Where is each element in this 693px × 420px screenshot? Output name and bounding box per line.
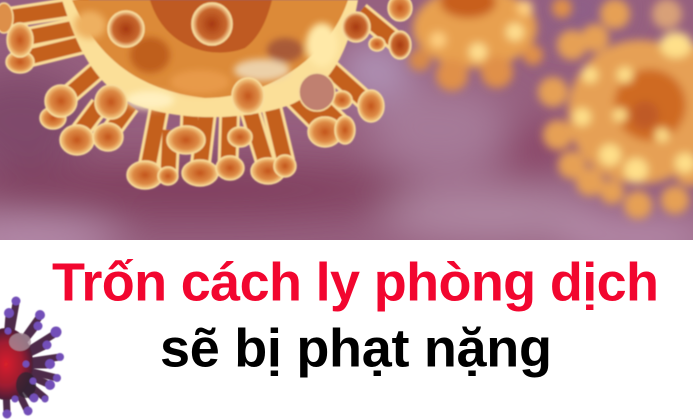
- icon: small red and purple virus: [0, 296, 64, 418]
- body: [62, 0, 358, 117]
- photo: coronavirus background: [0, 0, 693, 260]
- virus: middle blurred: [409, 0, 572, 91]
- title: red headline: Trốn cách ly phòng dịch: [52, 252, 659, 312]
- spike caps: [0, 0, 412, 189]
- virus: main in-focus: [0, 0, 412, 189]
- photo background haze: [0, 0, 693, 260]
- virus core: [0, 328, 33, 400]
- subtitle: black headline: sẽ bị phạt nặng: [160, 318, 552, 378]
- virus: right blurred far: [538, 0, 693, 219]
- spike stems: [5, 5, 400, 175]
- purple spike tips: [2, 296, 64, 418]
